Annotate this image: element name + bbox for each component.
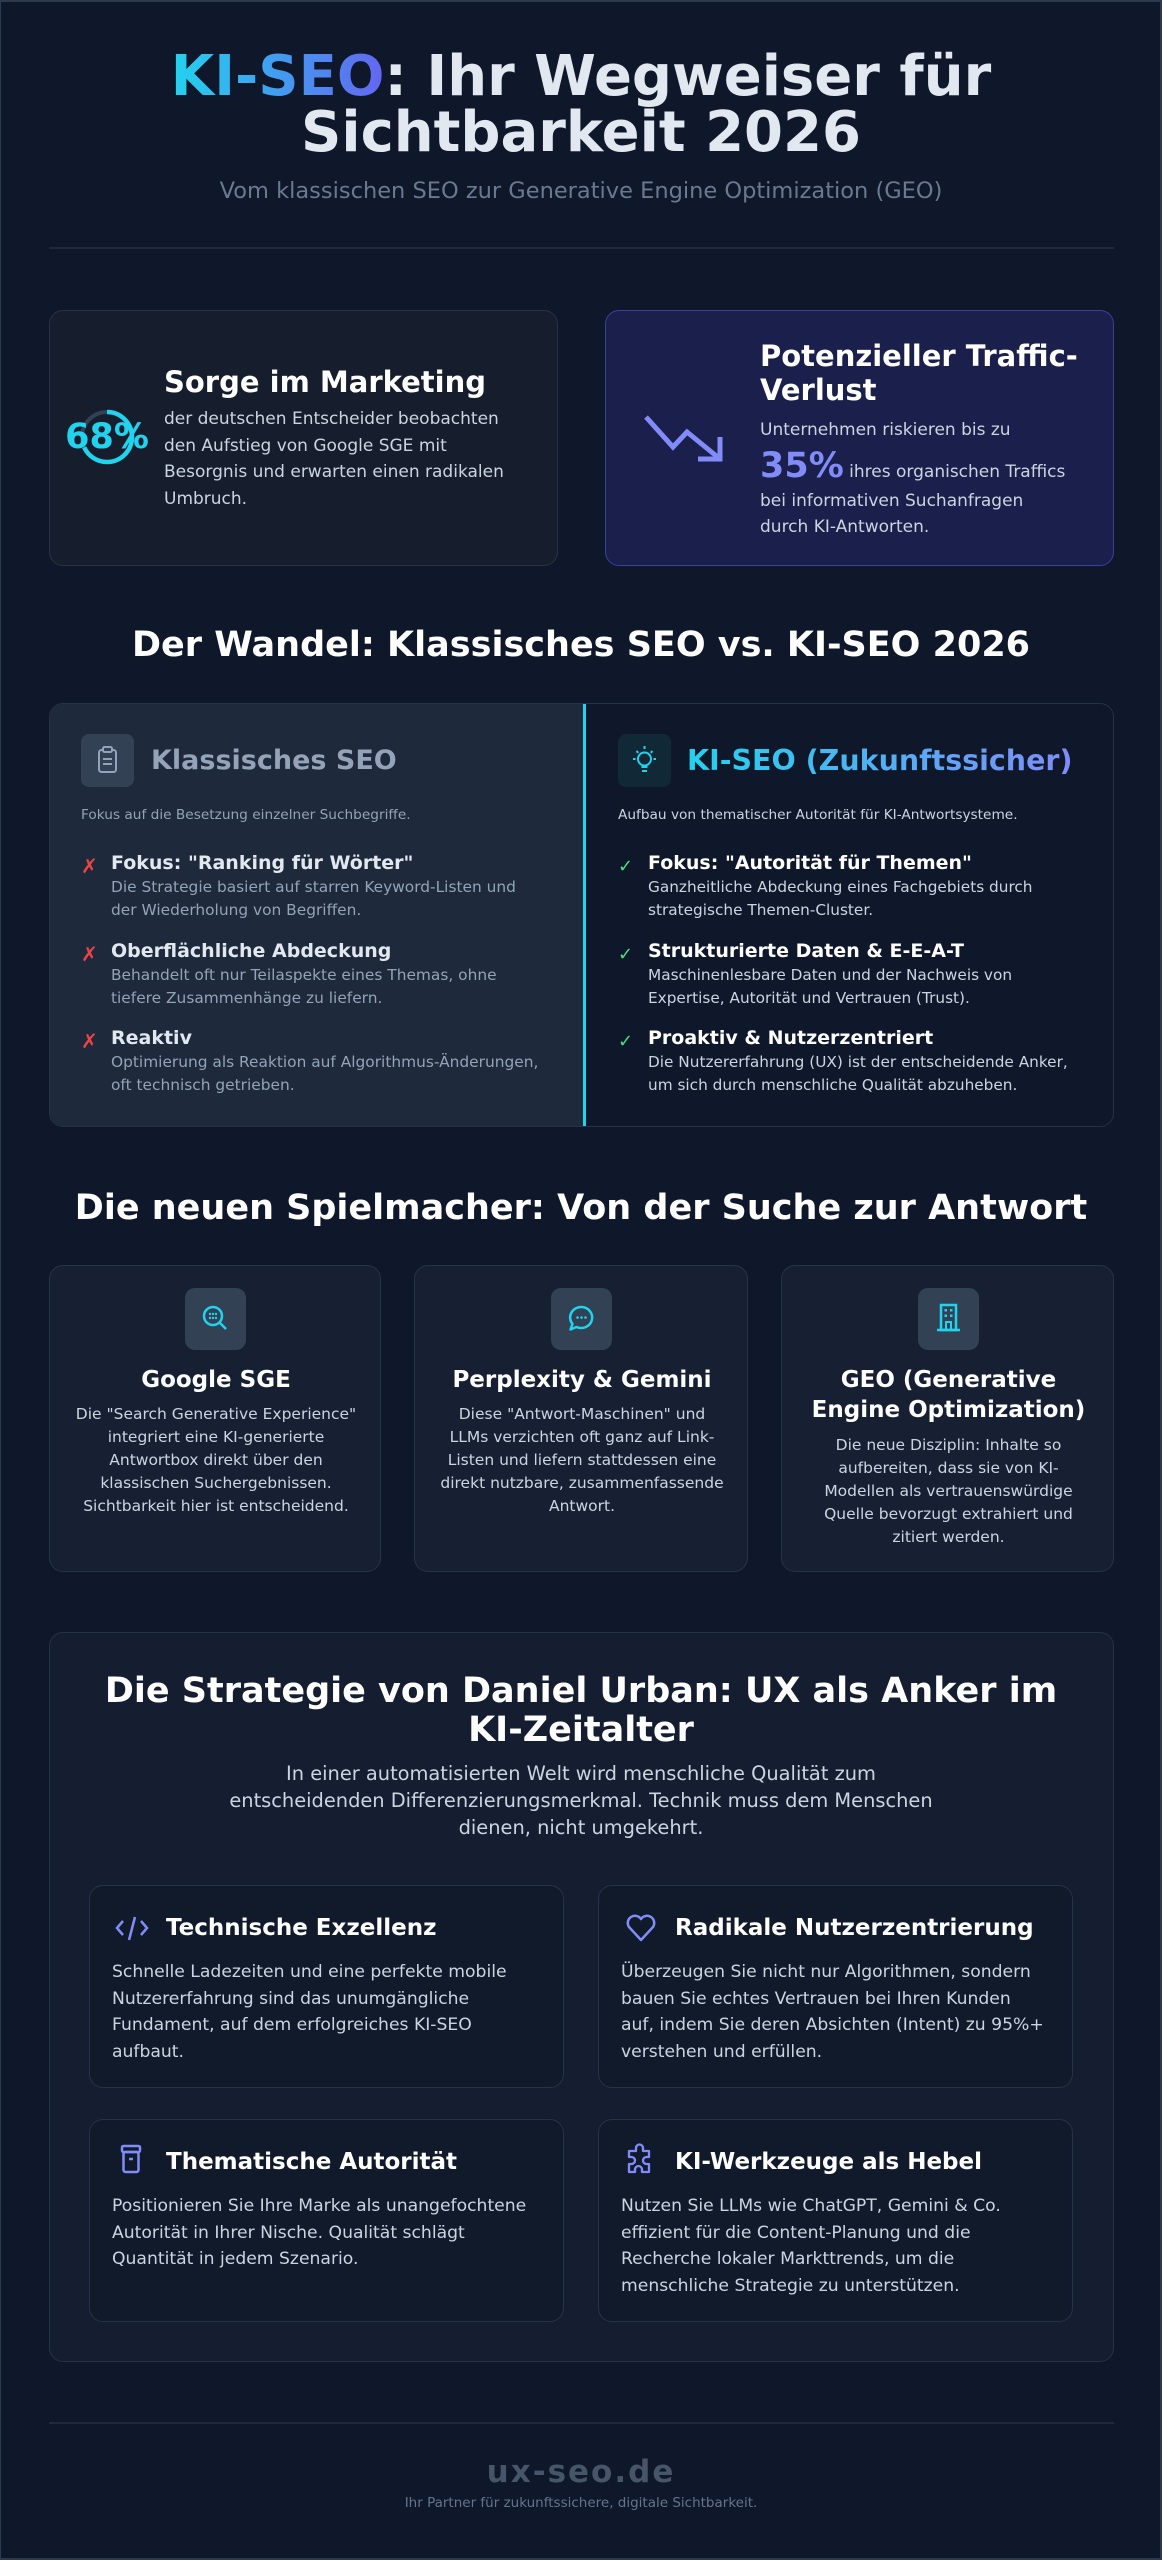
text bbox=[112, 1962, 507, 2062]
icon: chat bubble bbox=[551, 1288, 612, 1350]
list: klassisch bbox=[81, 852, 538, 1094]
list: klassisch: Die Strategie basiert auf starren Keyword-Listen und bbox=[111, 878, 516, 896]
heading bbox=[105, 1671, 1057, 1750]
list: klassisch: Optimierung als Reaktion auf Algorithmus-Änderungen, bbox=[111, 1053, 538, 1071]
text: Aufbau von thematischer Autorität für KI-Antwortsysteme. bbox=[618, 807, 1018, 823]
icon: building bbox=[918, 1288, 979, 1350]
list: klassisch: ✗ bbox=[81, 942, 98, 966]
list: klassisch: Fokus: "Ranking für Wörter" bbox=[111, 852, 413, 874]
card text: Sichtbarkeit hier ist entscheidend. bbox=[83, 1497, 349, 1515]
intro text: entscheidenden Differenzierungsmerkmal. Technik muss dem Menschen bbox=[229, 1789, 933, 1812]
stat text bbox=[760, 420, 1065, 537]
heading: Die Strategie von Daniel Urban: UX als Anker im bbox=[105, 1671, 1057, 1711]
icon: trending down arrow bbox=[644, 415, 722, 462]
stat text: der deutschen Entscheider beobachten bbox=[164, 409, 499, 429]
card text: LLMs verzichten oft ganz auf Link- bbox=[450, 1428, 714, 1446]
icon: ring chart 68%: 68% bbox=[65, 417, 149, 457]
card: KI-Werkzeuge bbox=[598, 2119, 1073, 2322]
text: Quantität in jedem Szenario. bbox=[112, 2249, 358, 2269]
text: Nutzererfahrung sind das unumgängliche bbox=[112, 1988, 469, 2008]
stat title: Sorge im Marketing bbox=[164, 365, 486, 399]
title: Thematische Autorität bbox=[166, 2149, 457, 2175]
list: KI-SEO: Ganzheitliche Abdeckung eines Fachgebiets durch bbox=[648, 878, 1032, 896]
icon: search bbox=[185, 1288, 246, 1350]
card text bbox=[440, 1405, 724, 1515]
intro text: In einer automatisierten Welt wird menschliche Qualität zum bbox=[286, 1762, 876, 1785]
title: Technische Exzellenz bbox=[166, 1915, 436, 1941]
icon: code bbox=[115, 1916, 149, 1940]
list: klassisch: Oberflächliche Abdeckung bbox=[111, 940, 391, 962]
text: auf, indem Sie deren Absichten (Intent) zu 95%+ bbox=[621, 2015, 1044, 2035]
text: Überzeugen Sie nicht nur Algorithmen, sondern bbox=[621, 1962, 1031, 1982]
icon: heart bbox=[626, 1914, 656, 1942]
icon: puzzle bbox=[628, 2143, 650, 2174]
list: klassisch: Reaktiv bbox=[111, 1027, 192, 1049]
card text: Die "Search Generative Experience" bbox=[76, 1405, 356, 1423]
list: KI-SEO: strategische Themen-Cluster. bbox=[648, 901, 873, 919]
stat title: Potenzieller Traffic- bbox=[760, 339, 1078, 373]
title: Radikale Nutzerzentrierung bbox=[675, 1915, 1034, 1941]
list: KI-SEO: Maschinenlesbare Daten und der Nachweis von bbox=[648, 966, 1012, 984]
footer: tagline: Ihr Partner für zukunftssichere, digitale Sichtbarkeit. bbox=[405, 2495, 757, 2511]
panel: GEO bbox=[781, 1265, 1114, 1572]
intro text bbox=[229, 1762, 933, 1839]
card text bbox=[76, 1405, 356, 1515]
card: Radikale Nutzerzentrierung bbox=[598, 1885, 1073, 2088]
text: effizient für die Content-Planung und die bbox=[621, 2222, 971, 2242]
list: KI-SEO: Fokus: "Autorität für Themen" bbox=[648, 852, 972, 874]
list: KI-SEO bbox=[618, 852, 1068, 1094]
card: Technische Exzellenz bbox=[89, 1885, 564, 2088]
card text: integriert eine KI-generierte bbox=[108, 1428, 324, 1446]
panel: Perplexity bbox=[414, 1265, 748, 1572]
text: bauen Sie echtes Vertrauen bei Ihren Kunden bbox=[621, 1988, 1011, 2008]
card title: Perplexity & Gemini bbox=[452, 1367, 712, 1393]
text: Positionieren Sie Ihre Marke als unangefochtene bbox=[112, 2196, 526, 2216]
title: KI-SEO: Ihr Wegweiser für bbox=[171, 44, 991, 109]
icon: clipboard bbox=[81, 734, 134, 787]
text: Recherche lokaler Markttrends, um die bbox=[621, 2249, 954, 2269]
footer: brand: ux-seo.de bbox=[487, 2454, 675, 2490]
card text: Quelle bevorzugt extrahiert und bbox=[824, 1505, 1073, 1523]
title: KI-Werkzeuge als Hebel bbox=[675, 2149, 982, 2175]
card text: Diese "Antwort-Maschinen" und bbox=[459, 1405, 705, 1423]
stat text: Besorgnis und erwarten einen radikalen bbox=[164, 462, 504, 482]
list: KI-SEO: Proaktiv & Nutzerzentriert bbox=[648, 1027, 933, 1049]
card text: Antwort. bbox=[549, 1497, 615, 1515]
text: Nutzen Sie LLMs wie ChatGPT, Gemini & Co. bbox=[621, 2196, 1001, 2216]
stat title: Verlust bbox=[760, 373, 877, 407]
stat text bbox=[164, 409, 504, 508]
stat text: den Aufstieg von Google SGE mit bbox=[164, 436, 447, 456]
stat text: 35% ihres organischen Traffics bbox=[760, 446, 1065, 486]
text: aufbaut. bbox=[112, 2042, 184, 2062]
icon: lightbulb bbox=[618, 734, 671, 787]
stat title bbox=[760, 339, 1078, 407]
card text: Antwortbox direkt über den bbox=[109, 1451, 323, 1469]
panel: KI-SEO bbox=[618, 734, 1072, 1094]
card text bbox=[824, 1436, 1073, 1546]
stat text: bei informativen Suchanfragen bbox=[760, 490, 1023, 510]
subtitle: Vom klassischen SEO zur Generative Engine Optimization (GEO) bbox=[220, 178, 942, 204]
icon: archive bbox=[120, 2144, 142, 2174]
heading: KI-SEO (Zukunftssicher) bbox=[687, 744, 1072, 777]
text: Fokus auf die Besetzung einzelner Suchbegriffe. bbox=[81, 807, 411, 823]
list: klassisch: ✗ bbox=[81, 854, 98, 878]
heading: Der Wandel: Der Wandel: Klassisches SEO vs. KI-SEO 2026 bbox=[132, 625, 1030, 665]
title: Sichtbarkeit 2026 bbox=[301, 100, 861, 165]
panel: klassisches SEO bbox=[50, 704, 584, 1128]
card text: klassischen Suchergebnissen. bbox=[100, 1474, 332, 1492]
card text: direkt nutzbare, zusammenfassende bbox=[440, 1474, 724, 1492]
list: KI-SEO: Expertise, Autorität und Vertrauen (Trust). bbox=[648, 989, 970, 1007]
text: verstehen und erfüllen. bbox=[621, 2042, 822, 2062]
panel: stat 68% bbox=[49, 310, 558, 566]
list: KI-SEO: ✓ bbox=[618, 944, 633, 965]
list: klassisch: Behandelt oft nur Teilaspekte eines Themas, ohne bbox=[111, 966, 497, 984]
card: Thematische Autorität bbox=[89, 2119, 564, 2322]
list: klassisch: der Wiederholung von Begriffen. bbox=[111, 901, 361, 919]
card title: Engine Optimization) bbox=[812, 1397, 1085, 1423]
text: menschliche Strategie zu unterstützen. bbox=[621, 2276, 960, 2296]
text bbox=[112, 2196, 526, 2269]
card text: Listen und liefern stattdessen eine bbox=[448, 1451, 716, 1469]
list: klassisch: ✗ bbox=[81, 1029, 98, 1053]
list: KI-SEO: ✓ bbox=[618, 1031, 633, 1052]
list: KI-SEO: ✓ bbox=[618, 856, 633, 877]
list: KI-SEO: Die Nutzererfahrung (UX) ist der entscheidende Anker, bbox=[648, 1053, 1068, 1071]
heading: Spielmacher: Die neuen Spielmacher: Von der Suche zur Antwort bbox=[75, 1188, 1087, 1228]
panel: traffic loss bbox=[605, 310, 1114, 566]
card title: Google SGE bbox=[141, 1367, 291, 1393]
text: Fundament, auf dem erfolgreiches KI-SEO bbox=[112, 2015, 472, 2035]
card text: zitiert werden. bbox=[892, 1528, 1005, 1546]
panel: strategy bbox=[49, 1632, 1114, 2362]
card text: Die neue Disziplin: Inhalte so bbox=[836, 1436, 1061, 1454]
heading: Klassisches SEO bbox=[151, 745, 397, 776]
panel: Google SGE bbox=[49, 1265, 381, 1572]
list: KI-SEO: Strukturierte Daten & E-E-A-T bbox=[648, 940, 964, 962]
text: Autorität in Ihrer Nische. Qualität schlägt bbox=[112, 2222, 465, 2242]
list: klassisch: tiefere Zusammenhänge zu liefern. bbox=[111, 989, 382, 1007]
title bbox=[171, 44, 992, 165]
text bbox=[621, 1961, 1044, 2062]
stat text: durch KI-Antworten. bbox=[760, 517, 929, 537]
list: KI-SEO: um sich durch menschliche Qualität abzuheben. bbox=[648, 1076, 1017, 1094]
stat text: Unternehmen riskieren bis zu bbox=[760, 420, 1011, 440]
card title bbox=[812, 1367, 1085, 1423]
panel: comparison bbox=[49, 703, 1114, 1127]
intro text: dienen, nicht umgekehrt. bbox=[459, 1816, 703, 1839]
stat text: Umbruch. bbox=[164, 488, 247, 508]
text bbox=[621, 2196, 1001, 2296]
heading: KI-Zeitalter bbox=[468, 1710, 694, 1750]
card text: Modellen als vertrauenswürdige bbox=[824, 1482, 1073, 1500]
card text: aufbereiten, dass sie von KI- bbox=[838, 1459, 1059, 1477]
list: klassisch: oft technisch getrieben. bbox=[111, 1076, 295, 1094]
text: Schnelle Ladezeiten und eine perfekte mobile bbox=[112, 1962, 507, 1982]
card title: GEO (Generative bbox=[841, 1367, 1056, 1393]
